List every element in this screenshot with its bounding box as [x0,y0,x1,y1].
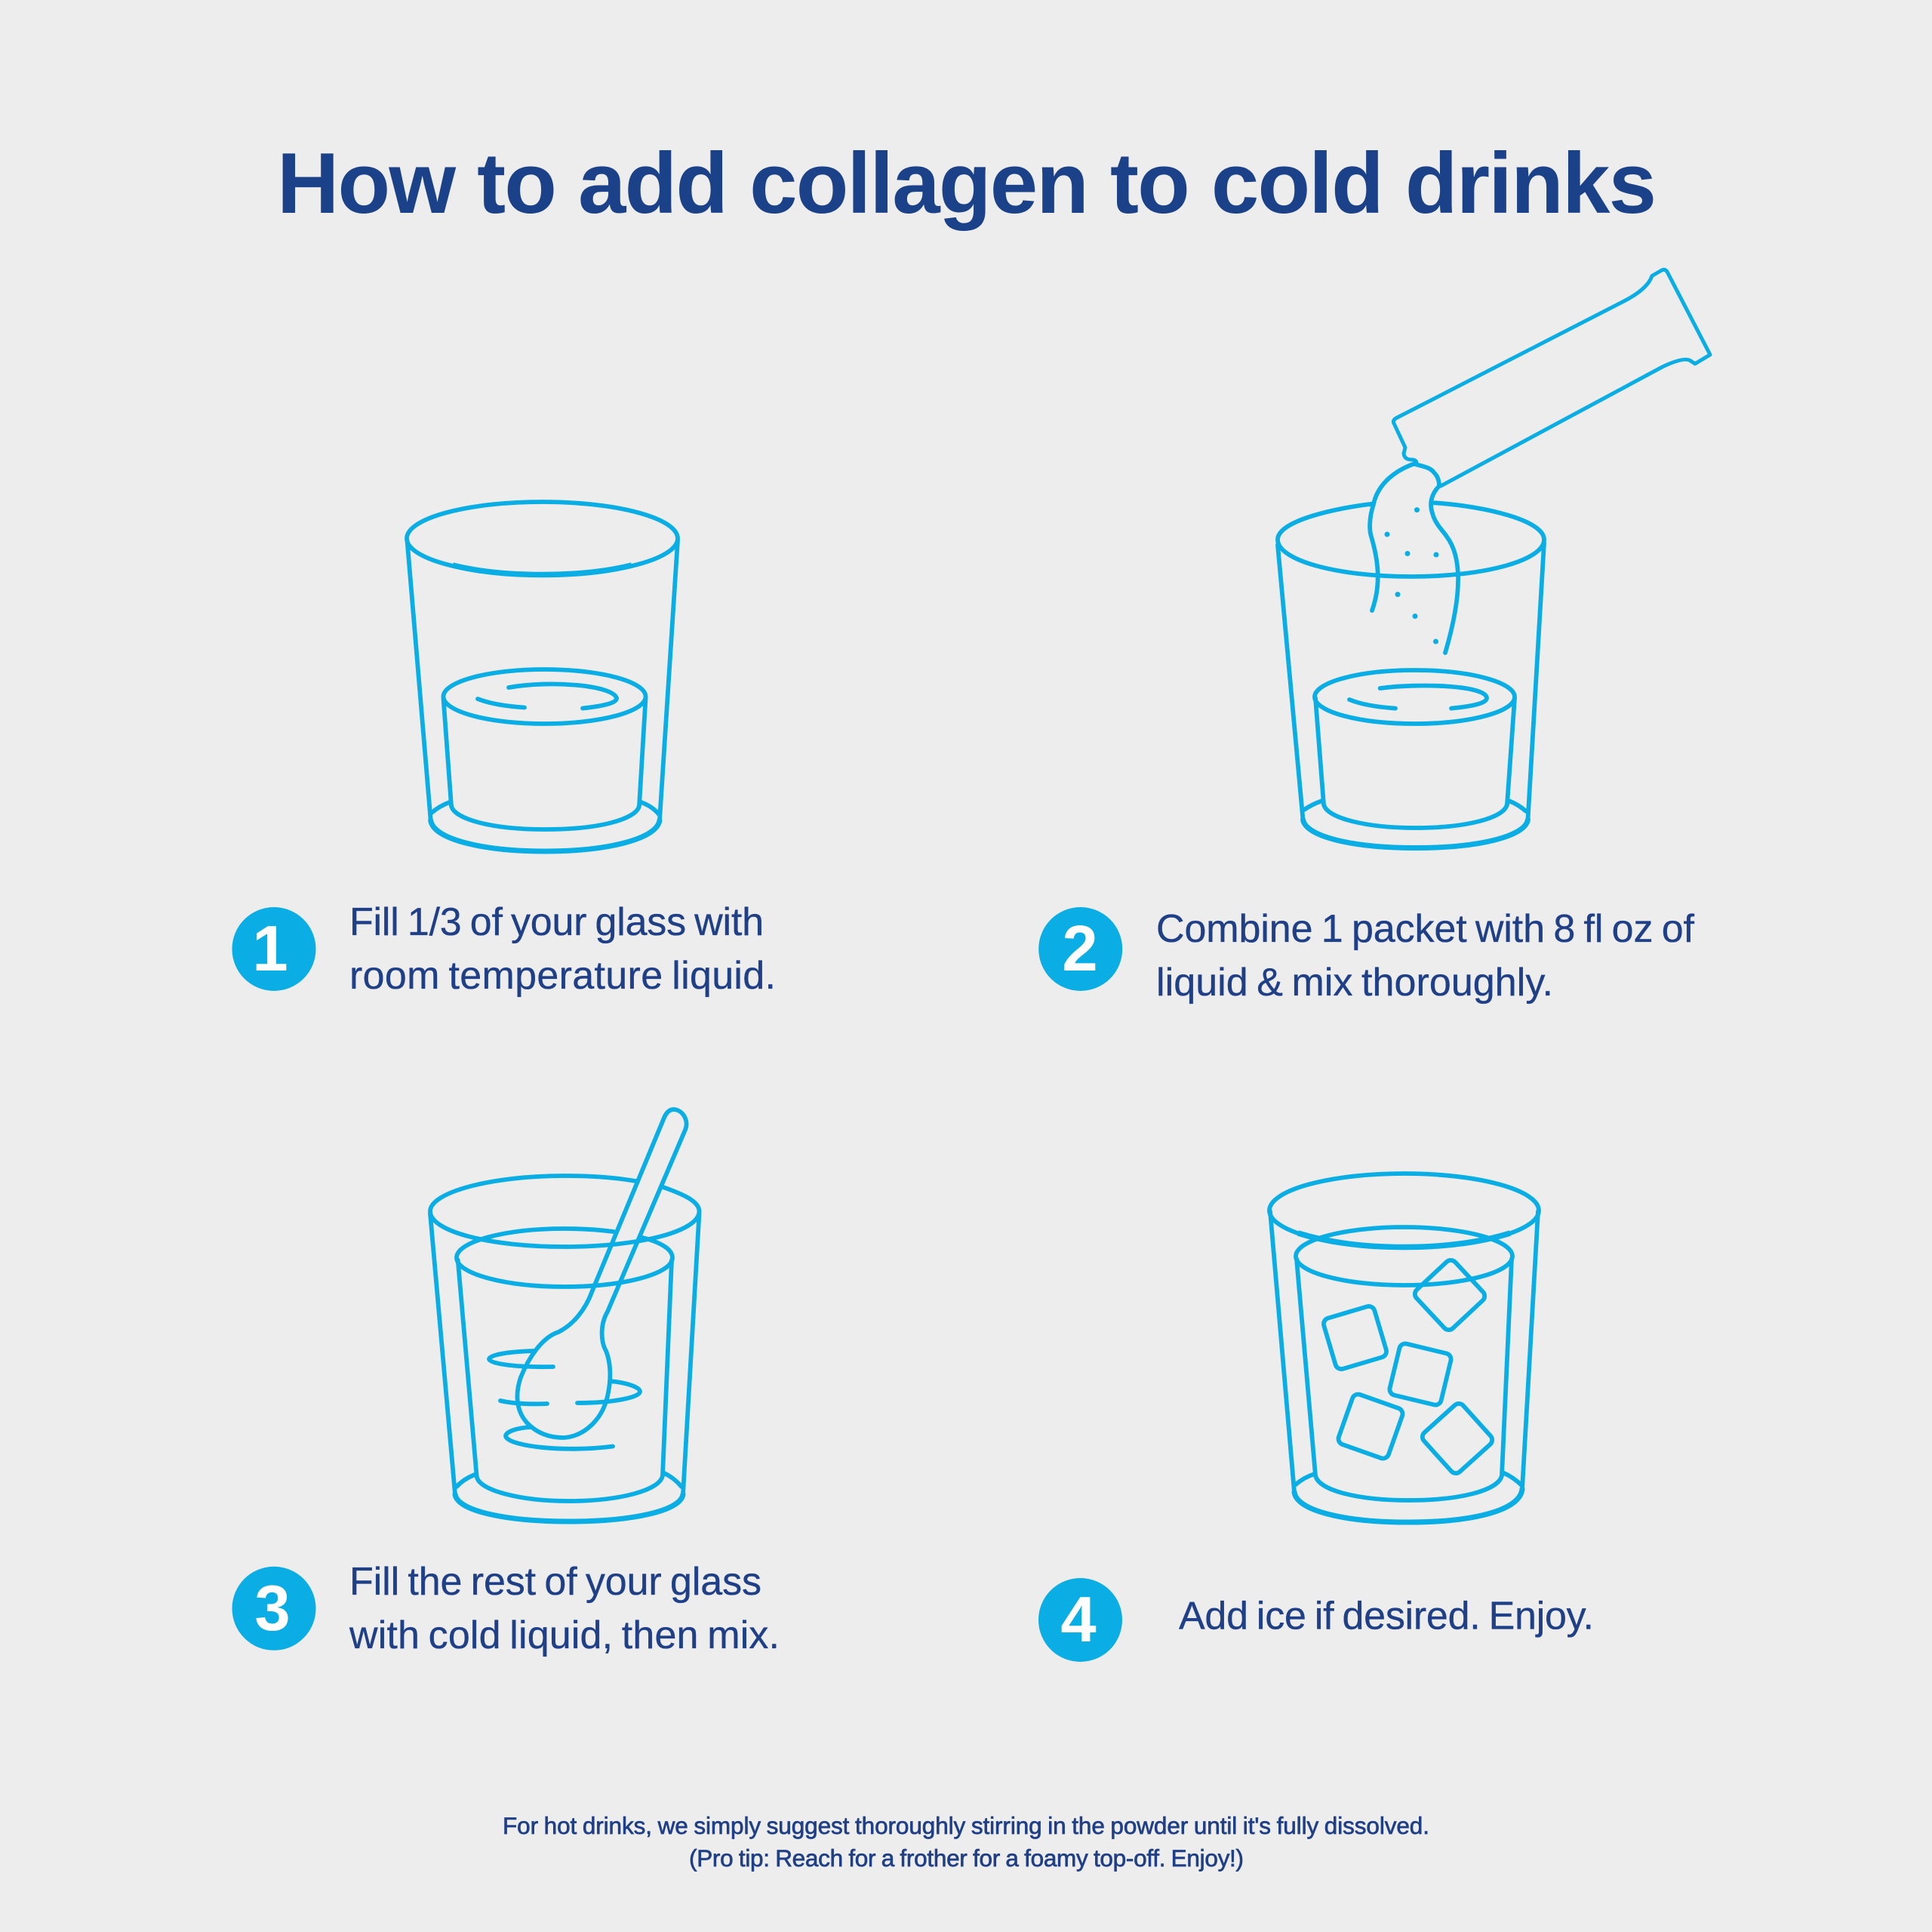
step number badge 2 [1038,907,1122,991]
step number badge 3 [232,1567,315,1651]
icon: glass with powder packet pouring [1278,269,1710,848]
ice cubes [1322,1305,1388,1371]
step number badge 1: 1 [252,913,288,985]
title: How to add collagen to cold drinks [277,136,1657,232]
step 3 text: Fill the rest of your glass [349,1560,761,1604]
step number badge 3: 3 [254,1573,291,1644]
step number badge 2: 2 [1062,913,1098,985]
step 2 text: liquid & mix thoroughly. [1156,961,1553,1004]
packet [1393,269,1710,486]
icon: glass one-third full [407,502,678,851]
spoon [517,1109,687,1438]
powder stream [1370,464,1414,611]
panel: step 3 [232,1109,780,1657]
step 2 text: Combine 1 packet with 8 fl oz of [1156,907,1695,951]
stirring lines [489,1351,553,1367]
step number badge 4 [1038,1578,1122,1662]
footnote [503,1812,1429,1872]
footnote: For hot drinks, we simply suggest thoroughly stirring in the powder until it's fully dissolved. [503,1812,1429,1839]
powder dots [1384,507,1438,645]
step 1 text [349,900,776,998]
panel: step 2 [1038,269,1710,1004]
step number badge 1 [232,907,315,991]
panel: step 4 [1038,1174,1594,1662]
step 1 text: room temperature liquid. [349,954,776,998]
panel: step 1 [232,502,776,998]
step 3 text [349,1560,780,1657]
step 4 text: Add ice if desired. Enjoy. [1179,1594,1594,1638]
step number badge 4: 4 [1060,1584,1097,1656]
footnote: (Pro tip: Reach for a frother for a foamy top-off. Enjoy!) [689,1844,1244,1872]
step 3 text: with cold liquid, then mix. [349,1614,780,1657]
step 1 text: Fill 1/3 of your glass with [349,900,764,944]
icon: glass with ice cubes [1269,1174,1539,1522]
icon: glass with spoon stirring [430,1109,699,1521]
step 2 text [1156,907,1695,1004]
